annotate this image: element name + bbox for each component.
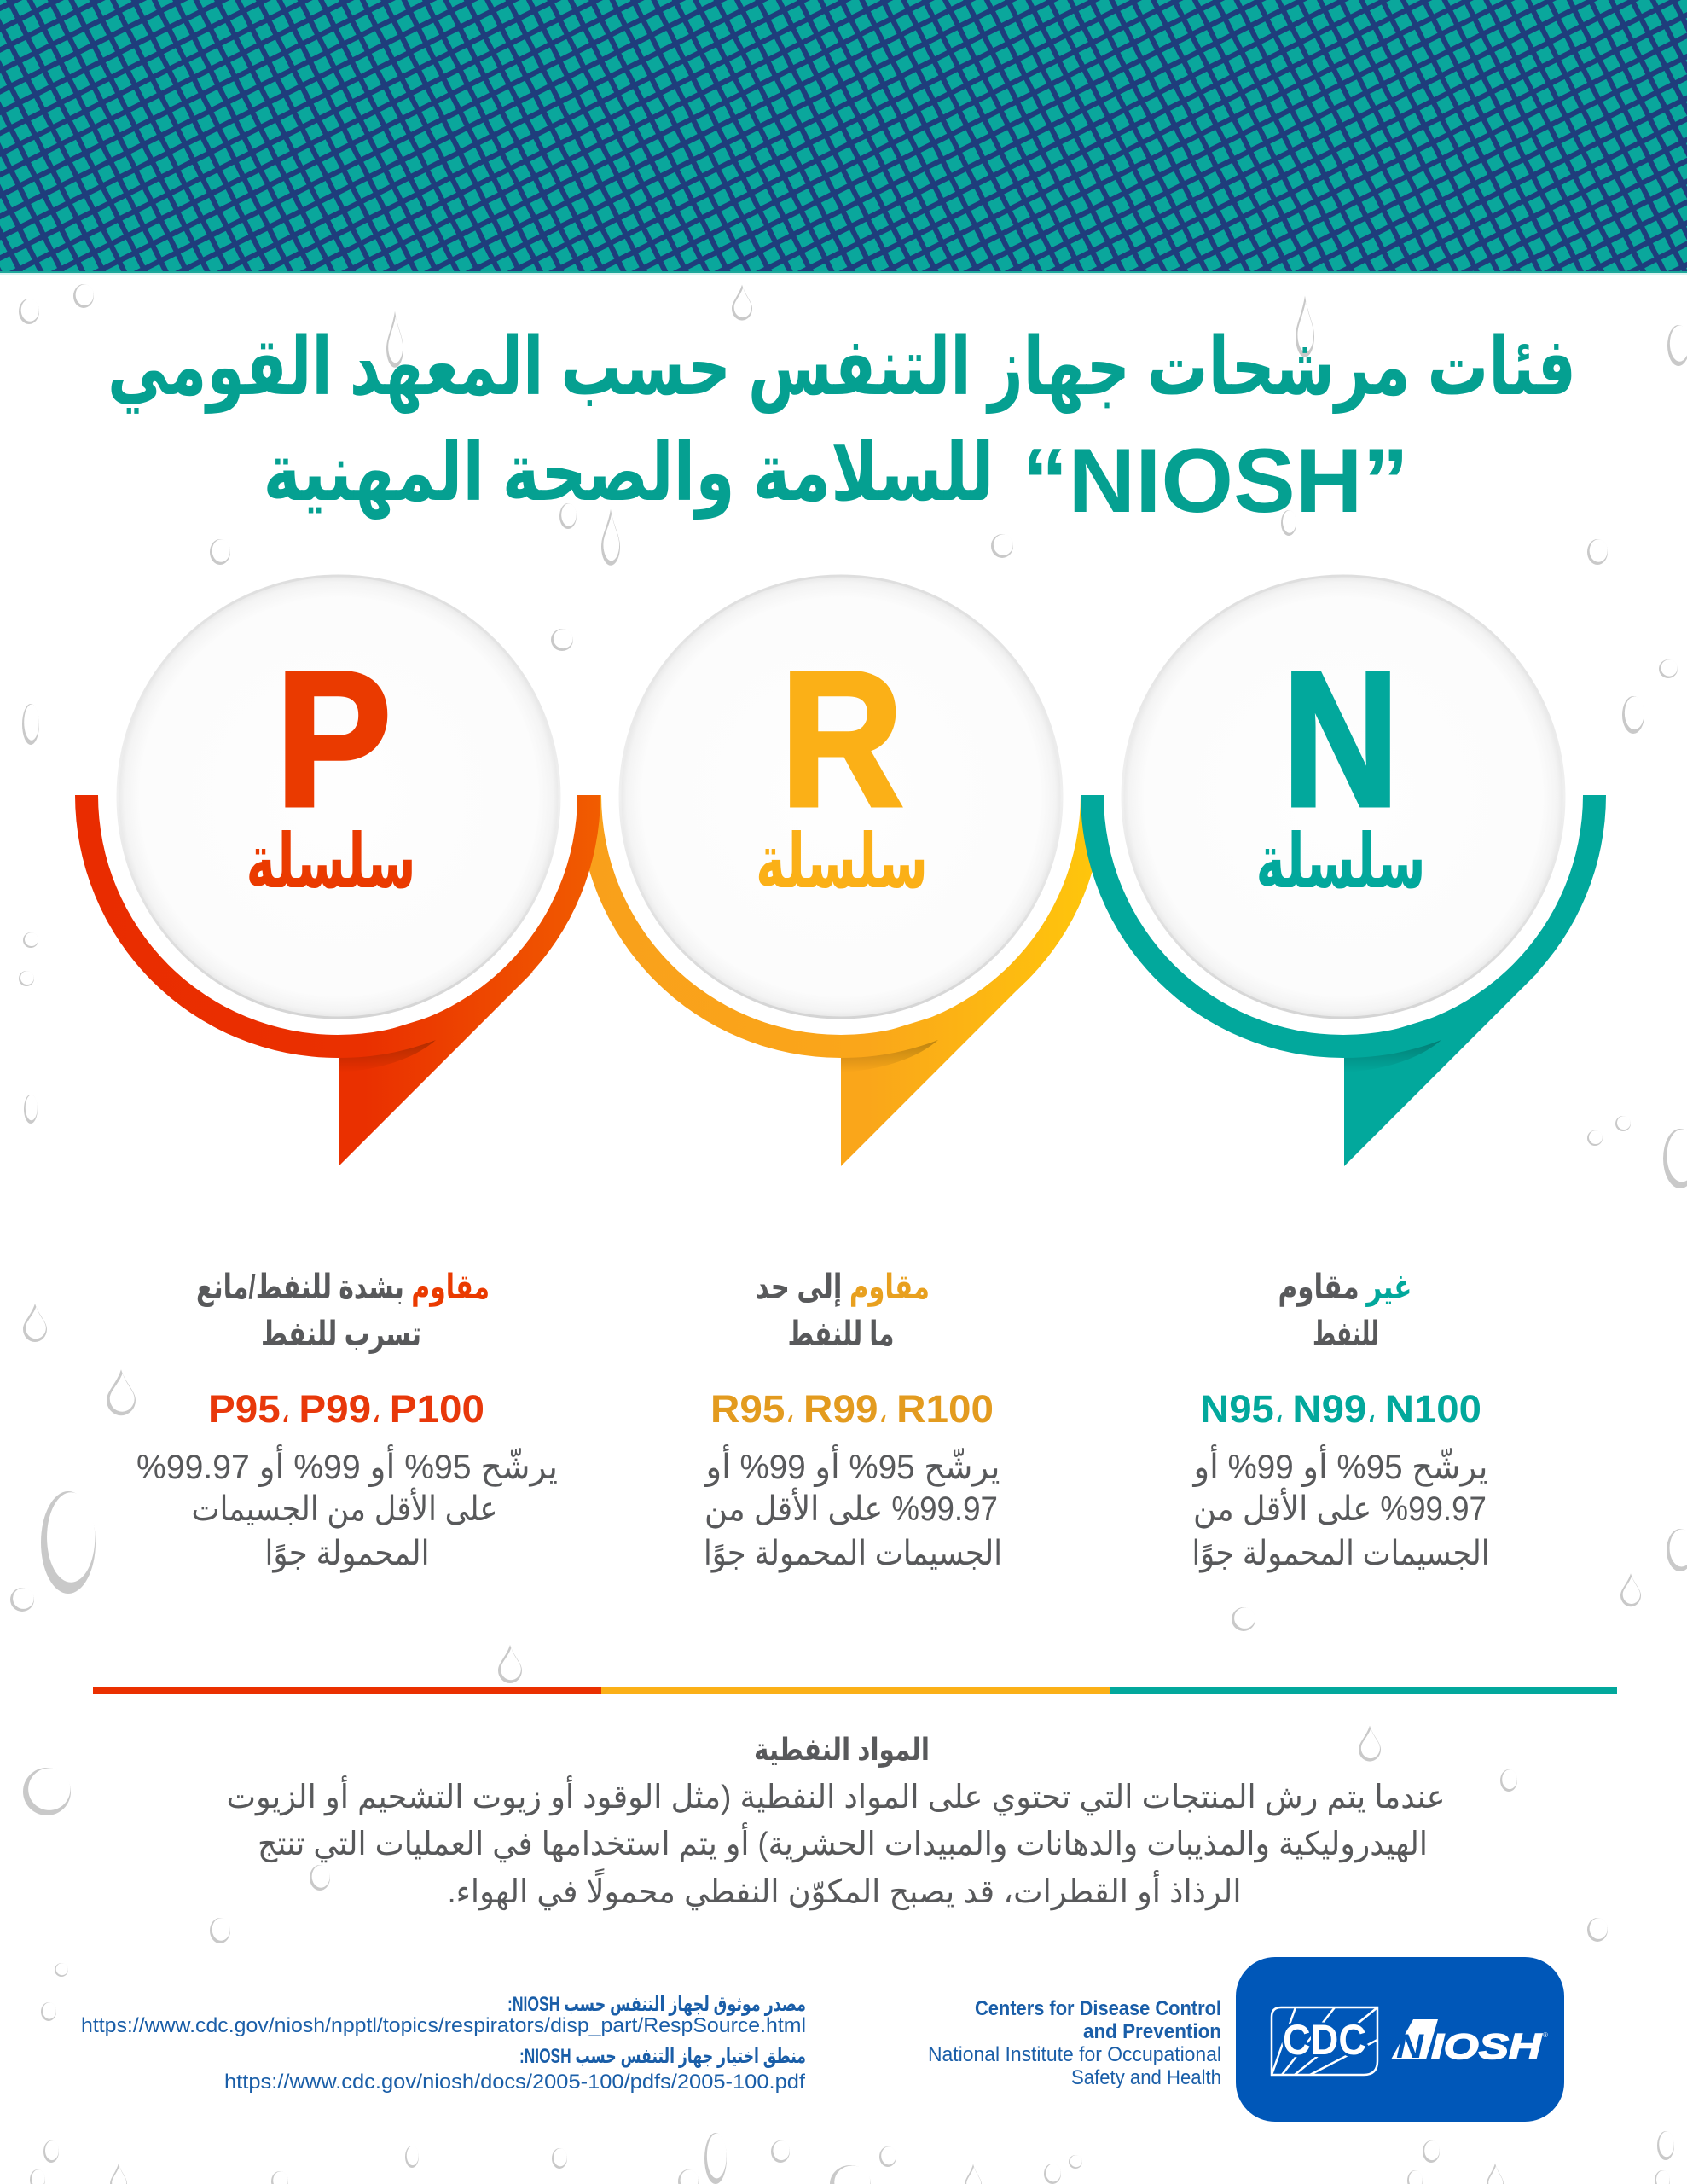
source links: https://www.cdc.gov/niosh/docs/2005-100/pdfs/2005-100.pdf [224,2071,805,2094]
N series word: سلسلة [1255,819,1426,903]
R ring and tail [578,795,1104,1166]
icon: CDC logo [1272,2007,1377,2075]
N ring and tail [1081,795,1606,1166]
P body text [136,1444,558,1573]
icon: NIOSH logo: ® [1543,2031,1548,2039]
R body text: الجسيمات المحمولة جوًا [704,1535,1002,1573]
oil heading: المواد النفطية [754,1732,930,1768]
tri-colour divider [93,1687,1617,1694]
source links: مصدر موثوق لجهاز التنفس حسب NIOSH: [507,1993,806,2016]
oil paragraph: عندما يتم رش المنتجات التي تحتوي على المواد النفطية (مثل الوقود أو زيوت التشحيم أو الزيوت [227,1775,1445,1816]
agency names [928,1997,1221,2089]
N heading: للنفط [1313,1316,1379,1353]
P body text: المحمولة جوًا [264,1535,430,1573]
R bubble [620,576,1062,1018]
P heading: تسرب للنفط [261,1316,421,1354]
panel: P description [136,1269,558,1573]
P filter classes: P95، P99، P100 [208,1387,484,1431]
panel: R series badge [578,576,1104,1166]
agency names: and Prevention [1083,2020,1221,2043]
N body text: الجسيمات المحمولة جوًا [1192,1535,1489,1573]
panel: N description [1192,1269,1489,1573]
R series word: سلسلة [756,819,928,903]
panel: P series badge [75,576,600,1166]
oil note [227,1732,1445,1911]
icon: NIOSH logo [1391,2019,1548,2066]
icon: CDC logo: CDC [1283,2016,1366,2064]
R heading [756,1269,930,1353]
title: للسلامة والصحة المهنية [263,427,994,520]
R body text [704,1444,1002,1573]
icon: NIOSH logo: IOSH [1431,2026,1543,2066]
P bubble [118,576,559,1018]
top mesh band [0,0,1687,275]
agency names: National Institute for Occupational [928,2043,1221,2066]
source links: https://www.cdc.gov/niosh/npptl/topics/respirators/disp_part/RespSource.html [81,2014,806,2037]
N heading [1278,1269,1412,1353]
N body text: ؜99.97% على الأقل من [1193,1487,1487,1529]
agency names: Centers for Disease Control [975,1997,1221,2020]
oil paragraph [227,1775,1445,1911]
R body text: ؜99.97% على الأقل من [704,1487,998,1529]
P heading [196,1269,490,1354]
P body text: على الأقل من الجسيمات [191,1487,498,1529]
logo panel [1236,1957,1564,2122]
R letter: R [780,630,903,846]
oil paragraph: الرذاذ أو القطرات، قد يصبح المكوّن النفطي محمولًا في الهواء. [447,1868,1242,1911]
agency names: Safety and Health [1071,2066,1221,2089]
N heading: غير مقاوم [1278,1269,1412,1307]
N filter classes: N95، N99، N100 [1200,1387,1481,1431]
R heading: مقاوم إلى حد [756,1269,930,1307]
R body text: يرشّح 95% أو 99% أو [704,1444,1000,1487]
panel: N series badge [1081,576,1606,1166]
oil paragraph: الهيدروليكية والمذيبات والدهانات والمبيدات الحشرية) أو يتم استخدامها في العمليات التي تنتج [258,1822,1428,1863]
P series word: سلسلة [246,819,416,903]
title: “NIOSH” [1022,429,1409,531]
P heading: مقاوم بشدة للنفط/مانع [196,1269,490,1307]
P body text: يرشّح 95% أو 99% أو 99.97% [136,1444,558,1487]
icon: NIOSH logo: N [1396,2028,1424,2065]
R heading: ما للنفط [788,1316,894,1353]
N body text: يرشّح 95% أو 99% أو [1192,1444,1487,1487]
R filter classes: R95، R99، R100 [710,1387,994,1431]
title [107,322,1576,531]
panel: R description [704,1269,1002,1573]
P ring and tail [75,795,600,1166]
source links: منطق اختيار جهاز التنفس حسب NIOSH: [519,2045,806,2068]
P letter: P [275,630,391,846]
N letter: N [1283,630,1399,846]
source links [81,1993,806,2094]
N bubble [1122,576,1564,1018]
N body text [1192,1444,1489,1573]
